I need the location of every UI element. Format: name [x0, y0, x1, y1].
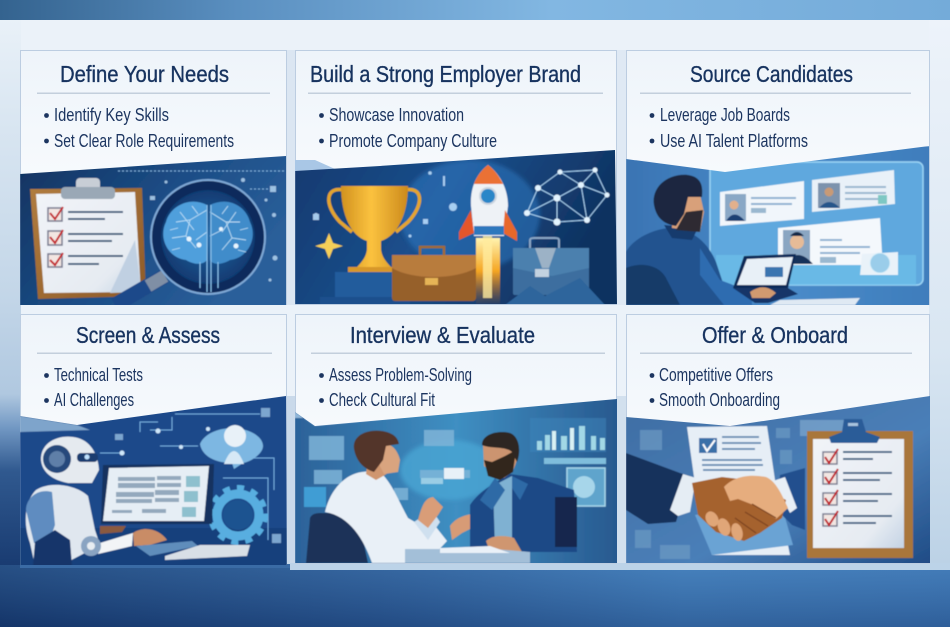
bullet list: Showcase Innovation [329, 105, 464, 125]
bullet list [650, 365, 780, 410]
icon: clipboard checklist [30, 178, 146, 299]
title: Screen & Assess [76, 322, 220, 348]
bullet list: Assess Problem-Solving [329, 365, 472, 385]
illustration: handshake, offer letter, clipboard [626, 394, 931, 564]
panel: source candidates [626, 50, 930, 306]
icon: podium [334, 272, 392, 298]
title: Build a Strong Employer Brand [310, 61, 581, 87]
bullet list: Check Cultural Fit [329, 390, 435, 410]
bullet list [319, 105, 497, 151]
bullet list [44, 105, 234, 151]
bullet list [319, 365, 472, 410]
bullet list: Smooth Onboarding [659, 390, 780, 410]
bullet list: AI Challenges [54, 390, 134, 410]
icon: sparkle star [315, 233, 343, 259]
icon: clasped hands [692, 476, 788, 542]
icon: clipboard checklist [807, 419, 913, 558]
illustration: robot taking technical test [20, 394, 287, 566]
bullet list: Use AI Talent Platforms [660, 131, 808, 151]
panel: screen and assess [20, 314, 287, 566]
illustration: interview conversation [295, 396, 618, 564]
panel: build a strong employer brand [295, 50, 618, 306]
title: Define Your Needs [60, 61, 229, 87]
person: candidate [470, 432, 577, 552]
icon: keyboard and tablet [136, 541, 250, 560]
candidate card 1 [720, 181, 804, 226]
icon: right sleeve [773, 468, 805, 530]
title: Offer & Onboard [702, 322, 848, 348]
bullet list: Competitive Offers [659, 365, 773, 385]
icon: dashboard charts [530, 418, 606, 506]
bottom banner [0, 563, 950, 627]
icon: robot [26, 437, 167, 566]
bullet list [44, 365, 143, 410]
icon: computer monitor [101, 464, 214, 524]
panel: interview and evaluate [295, 314, 618, 564]
icon: laptop [733, 254, 860, 305]
panel: define your needs [20, 50, 287, 306]
icon: brown briefcase [392, 247, 476, 301]
bullet list: Technical Tests [54, 365, 143, 385]
title: Interview & Evaluate [350, 322, 535, 348]
bullet list: Leverage Job Boards [660, 105, 790, 125]
title: Source Candidates [690, 61, 853, 87]
icon: offer letter [687, 426, 793, 555]
top banner [0, 0, 950, 20]
person: interviewer [325, 431, 484, 563]
icon: blue briefcase [505, 238, 605, 305]
bullet list: Identify Key Skills [54, 105, 169, 125]
person: recruiter [626, 175, 752, 305]
illustration: trophy, briefcases, rocket, network [295, 148, 618, 306]
icon: trophy [329, 186, 420, 272]
illustration: recruiter browsing candidate profiles [626, 146, 930, 306]
icon: left sleeve [626, 453, 696, 524]
illustration: clipboard and brain under magnifier [20, 150, 287, 306]
icon: rocket [459, 165, 517, 304]
bullet list: Set Clear Role Requirements [54, 131, 234, 151]
icon: dark chair [306, 513, 368, 563]
candidate card 3 [778, 218, 882, 265]
icon: speech bubble [200, 425, 263, 469]
icon: network graph [524, 168, 610, 226]
bullet list [650, 105, 808, 151]
panel: offer and onboard [626, 314, 931, 564]
icon: gear [211, 488, 265, 542]
icon: magnifying glass with brain [115, 179, 266, 305]
icon: table with papers [405, 546, 530, 563]
candidate card 2 [812, 170, 895, 212]
bullet list: Promote Company Culture [329, 131, 497, 151]
